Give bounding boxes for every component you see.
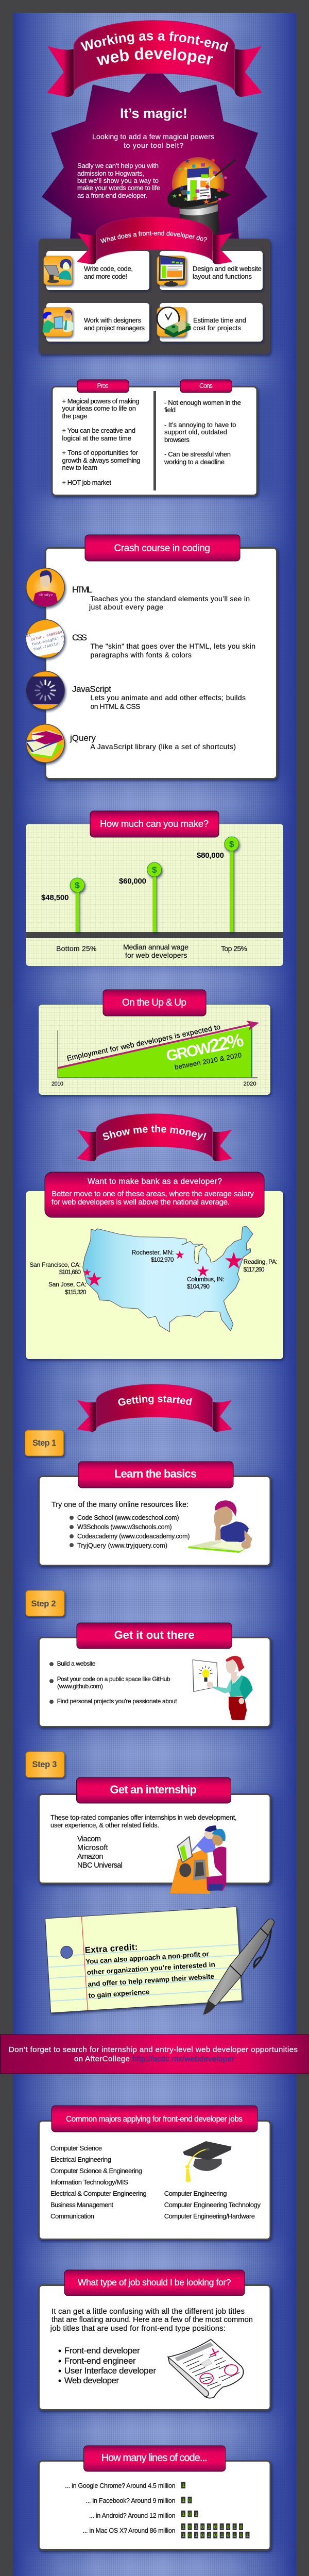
binary block tally: 1 [182,2533,185,2539]
internship intro: These top-rated companies offer internships in web development, [50,1814,237,1821]
intro paragraph: as a front-end developer. [77,192,147,199]
tab: crash course [85,535,240,561]
pros list: + You can be creative and [62,427,135,434]
lines of code labels: ... in Android? Around 12 million [89,2512,176,2519]
panel: how many lines of code [39,2446,270,2550]
icon: newspaper [168,2340,244,2398]
pros list: new to learn [62,464,97,471]
cons list: - Not enough women in the [164,399,241,406]
icon: css code: h2{ [24,634,31,639]
company list: Viacom [77,1835,101,1843]
step 2 badge: Step 2 [31,1599,56,1608]
binary block tally: 1 [233,2533,236,2539]
illustration: two interns at computer [170,1825,226,1894]
item: css: CSS [72,633,87,642]
heading: It's magic: It’s magic! [120,106,187,121]
map labels: $104,790 [187,1283,210,1290]
majors list right: Computer Engineering/Hardware [164,2212,255,2220]
company list: NBC Universal [77,1861,123,1870]
step 3 badge: Step 3 [32,1760,57,1769]
tab: pros [77,380,129,393]
pros list: + Magical powers of making [62,397,139,405]
note text: other organization you’re interested in [87,1960,215,1976]
resource list: Code School (www.codeschool.com) [77,1514,179,1521]
map labels [29,1249,278,1296]
binary block tally: 0 [201,2533,204,2539]
intro question [92,132,214,149]
panel: what does a front-end developer do [39,239,270,354]
majors list left: Business Management [50,2201,113,2209]
chart: employment growth [52,1021,259,1087]
tab: get an internship: Get an internship [110,1783,197,1796]
tab: up and up [103,990,206,1016]
note text: to gain experience [88,1988,150,1999]
step 1 badge: Step 1 [32,1438,56,1448]
icon: html person [26,568,65,608]
banner: show me the money [77,1114,232,1161]
binary block tally: 0 [239,2525,243,2531]
cons list: - Can be stressful when [164,450,231,458]
binary block tally: 1 [208,2525,211,2531]
banner: what does a front-end developer do [77,216,232,264]
majors list left: Electrical & Computer Engineering [50,2190,147,2197]
item: css [72,633,255,659]
tab: common majors [52,2106,258,2132]
binary block tally: 1 [195,2525,198,2531]
chart labels: for web developers [125,951,187,959]
panel: learn the basics [39,1462,270,1565]
step 1 badge [25,1430,64,1456]
intro question: Looking to add a few magical powers [92,132,214,141]
task card: estimate time and cost [157,303,263,342]
tab: how many lines [84,2446,226,2471]
illustration: woman with light bulb [193,1656,253,1720]
binary block tally: 0 [188,2498,192,2504]
chart: salary lollipops: $ [75,880,80,890]
map labels: $115,320 [65,1289,87,1296]
pros list: the page [62,412,88,420]
binary block tally: 0 [188,2512,192,2518]
pros list: logical at the same time [62,434,131,442]
item: html [72,585,250,611]
task card: design and edit: layout and functions [193,273,252,280]
icon: css code: font-family: A [33,640,65,652]
jobs intro: It can get a little confusing with all the different job titles [52,2307,245,2316]
item: html: Teaches you the standard elements you’ll see in [91,595,250,603]
cons list: - It’s annoying to have to [164,421,236,429]
chart labels [56,943,247,959]
task card: write code [44,251,149,290]
intro paragraph: admission to Hogwarts, [77,170,144,177]
task card: work with designers: and project managers [84,324,145,332]
binary block tally: 1 [233,2525,236,2531]
map of the United States [83,1226,253,1332]
pros list: + HOT job market [62,479,111,486]
icon: jquery books [26,724,65,763]
icon: magic hat with web page [167,157,235,238]
banner: what does a front-end developer do: What does a front-end developer do? [100,231,207,243]
tab: want to make bank: Better move to one of these areas, where the average salary [52,1190,254,1198]
majors list left: Computer Science & Engineering [50,2167,142,2175]
task card: design and edit: Design and edit website [193,265,262,273]
starburst intro panel [42,64,267,240]
map labels: Reading, PA: [244,1258,278,1265]
intro paragraph: but we’ll show you a way to [77,177,159,184]
action list: Build a website [57,1660,96,1667]
step 2 badge [26,1590,64,1616]
map labels: $117,260 [244,1266,265,1273]
title line 2: web developer [96,47,213,65]
chart: salary lollipops: $48,500 [41,893,69,902]
tab: pros: Pros [97,382,108,389]
company list: Amazon [77,1853,103,1861]
tab: learn the basics [78,1462,233,1488]
item: jquery: A JavaScript library (like a set of shortcuts) [91,742,236,751]
note heading: Extra credit: [84,1942,138,1955]
axis bar [26,932,283,938]
internship intro: user experience, & other related fields. [50,1821,159,1829]
note: extra credit [45,1907,274,2015]
job title list [59,2346,156,2385]
cons list: browsers [164,436,190,444]
action list: Post your code on a public space like GitHub [57,1675,170,1683]
item: css: paragraphs with fonts & colors [91,651,192,659]
binary block tally: 1 [195,2533,198,2539]
tab: up and up: On the Up & Up [122,997,186,1008]
task card: work with designers: Work with designers [84,316,141,324]
icon: css code: color: #696969; [30,630,65,642]
binary block tally: 0 [188,2525,192,2531]
chart: salary lollipops: $80,000 [197,851,224,860]
panel: what type of job [39,2270,270,2410]
tab: crash course: Crash course in coding [114,543,210,554]
action list [49,1660,177,1705]
icon: graduation cap [183,2141,232,2182]
binary block tally: 0 [239,2533,243,2539]
title line 1: Working as a front-end [80,31,228,52]
item: javascript: Lets you animate and add other effects; builds [91,693,246,702]
map labels: $101,660 [59,1268,81,1276]
binary block tally: 0 [227,2533,230,2539]
chart: employment growth: between 2010 & 2020 [174,1051,242,1071]
tab: learn the basics: Learn the basics [114,1467,197,1480]
intro line: Try one of the many online resources like: [52,1501,188,1509]
intro paragraph [77,162,160,199]
item: javascript: on HTML & CSS [91,702,140,710]
company list: Microsoft [77,1844,108,1852]
intro paragraph: make your words come to life [77,184,160,192]
majors list right [164,2190,261,2220]
tab: common majors: Common majors applying for front-end developer jobs [66,2115,243,2124]
chart: employment growth: Employment for web developers is expected to [66,1023,221,1062]
map labels: San Francisco, CA: [29,1261,81,1268]
intro paragraph: Sadly we can’t help you with [77,162,159,170]
divider [153,391,156,490]
map labels: Columbus, IN: [187,1276,225,1283]
tab: get it out there [77,1623,232,1649]
tab: what type of job [64,2270,245,2296]
majors list left [50,2144,147,2220]
intro question: to your tool belt? [124,141,183,149]
task card: design and edit [157,251,263,290]
job title list: Front-end engineer [64,2356,136,2366]
action list: (www.github.com) [57,1683,103,1690]
chart: employment growth: 2020 [244,1081,256,1087]
cons list: field [164,406,176,414]
resource list: Codeacademy (www.codeacademy.com) [77,1533,190,1540]
icon: css code [23,619,70,658]
resource list: TryjQuery (www.tryjquery.com) [77,1542,167,1549]
binary block tally: 0 [227,2525,230,2531]
chart: salary lollipops: $ [152,865,157,875]
tab: get it out there: Get it out there [114,1629,195,1641]
panel: pros and cons [52,380,257,496]
icon: css code: font-weight: 500 [31,634,69,647]
banner: getting started [77,1384,232,1432]
icon: html person: <body> [39,592,54,597]
binary block tally: 0 [214,2525,217,2531]
panel: common majors [39,2106,270,2239]
map stars [83,1250,243,1286]
call to action stripe: http://acdc.mx/webdeveloper [132,2055,234,2063]
binary block tally: 1 [246,2533,249,2539]
chart: salary lollipops: $60,000 [119,877,146,886]
binary block tally: 1 [195,2512,198,2518]
map labels: Rochester, MN: [132,1249,174,1256]
banner: getting started: Getting started [118,1395,192,1405]
binary block tally: 1 [182,2498,185,2504]
chart: salary lollipops [41,837,239,932]
panel: get it out there [39,1623,270,1727]
note text: and offer to help revamp their website [88,1973,215,1988]
icon: javascript spinner [25,671,66,710]
pros list: your ideas come to life on [62,404,136,412]
pros list: growth & always something [62,456,140,464]
lines of code labels: ... in Google Chrome? Around 4.5 million [65,2482,176,2489]
tab: cons: Cons [199,382,213,389]
internship intro [50,1814,237,1829]
task card: estimate time and cost: Estimate time and [193,316,246,324]
chart: employment growth: 2010 [52,1081,63,1087]
tab: want to make bank: for web developers is well above the national average. [52,1198,230,1207]
binary block tally: 1 [182,2512,185,2518]
majors list right: Computer Engineering Technology [164,2201,261,2209]
panel: get an internship [39,1777,270,1894]
resource list: W3Schools (www.w3schools.com) [77,1523,172,1531]
tab: want to make bank [45,1172,264,1217]
chart: salary lollipops: $ [229,839,234,849]
tab: how much: How much can you make? [100,818,209,829]
binary block tally: 1 [182,2483,185,2489]
jobs intro: that are floating around. Here are a few of the most common [52,2315,253,2324]
pros list: + Tons of opportunities for [62,449,139,456]
item: jquery [70,733,236,751]
company list [77,1835,123,1870]
binary block tally: 0 [201,2525,204,2531]
tab: what type of job: What type of job should I be looking for? [78,2277,231,2287]
note text [85,1950,215,1999]
binary block tally: 1 [208,2533,211,2539]
job title list: Web developer [64,2376,119,2385]
lines of code labels: ... in Facebook? Around 9 million [85,2497,176,2504]
majors list left: Computer Science [50,2144,102,2152]
task card: work with designers [43,303,149,342]
binary block tally: 1 [220,2525,224,2531]
jobs intro: job titles that are used for front-end type positions: [50,2324,226,2333]
binary block tally: 1 [220,2533,224,2539]
jobs intro [50,2307,253,2333]
note text: You can also approach a non-profit or [85,1950,210,1965]
illustration: student reading [188,1500,252,1553]
tab: want to make bank: Want to make bank as a developer? [88,1177,222,1186]
icon: pen [203,1919,274,2015]
panel: how much can you make [26,811,283,966]
task card: write code: Write code, code, [84,265,133,273]
binary block tally [181,2482,249,2539]
chart: employment growth: GROW22% [164,1029,246,1065]
item: javascript [72,684,246,710]
panel: crash course in coding [23,535,277,779]
panel: make bank map [26,1172,283,1359]
panel: on the up and up [39,990,270,1095]
call to action stripe: on AfterCollege [74,2055,130,2063]
lines of code labels: ... in Mac OS X? Around 86 million [83,2527,176,2534]
call to action stripe: Don’t forget to search for internship and entry-level web developer opportunities [9,2045,298,2054]
action list: Find personal projects you’re passionate about [57,1698,177,1705]
pros list [62,397,140,486]
banner: show me the money: Show me the money! [103,1125,207,1140]
majors list left: Communication [50,2212,94,2220]
binary block tally: 1 [182,2525,185,2531]
tab: cons [180,380,232,393]
tab: how many lines: How many lines of code... [101,2452,208,2464]
item: jquery: jQuery [70,733,96,743]
map labels: San Jose, CA: [48,1281,87,1288]
chart labels: Median annual wage [123,943,188,951]
cons list: working to a deadline [164,458,225,466]
cons list [164,399,241,466]
step 3 badge [26,1752,64,1777]
task card: write code: and more code! [84,273,127,280]
title banner [47,20,262,97]
majors list right: Computer Engineering [164,2190,227,2197]
chart labels: Top 25% [221,944,247,953]
tab: get an internship [76,1777,231,1803]
binary block tally: 0 [214,2533,217,2539]
job title list: User Interface developer [64,2366,156,2376]
majors list left: Electrical Engineering [50,2156,111,2163]
call to action stripe [0,2035,309,2074]
item: javascript: JavaScript [72,684,111,694]
job title list: Front-end developer [64,2346,140,2355]
item: html: HTML [72,585,92,595]
chart labels: Bottom 25% [56,944,97,953]
binary block tally: 0 [188,2533,192,2539]
item: html: just about every page [89,603,163,611]
resource list [70,1514,190,1549]
item: css: The "skin" that goes over the HTML, lets you skin [91,642,255,650]
task card: estimate time and cost: cost for projects [193,324,241,332]
tab: how much [90,811,219,837]
majors list left: Information Technology/MIS [50,2178,128,2186]
cons list: support old, outdated [164,428,227,436]
lines of code labels [65,2482,176,2534]
map labels: $102,970 [151,1256,174,1263]
